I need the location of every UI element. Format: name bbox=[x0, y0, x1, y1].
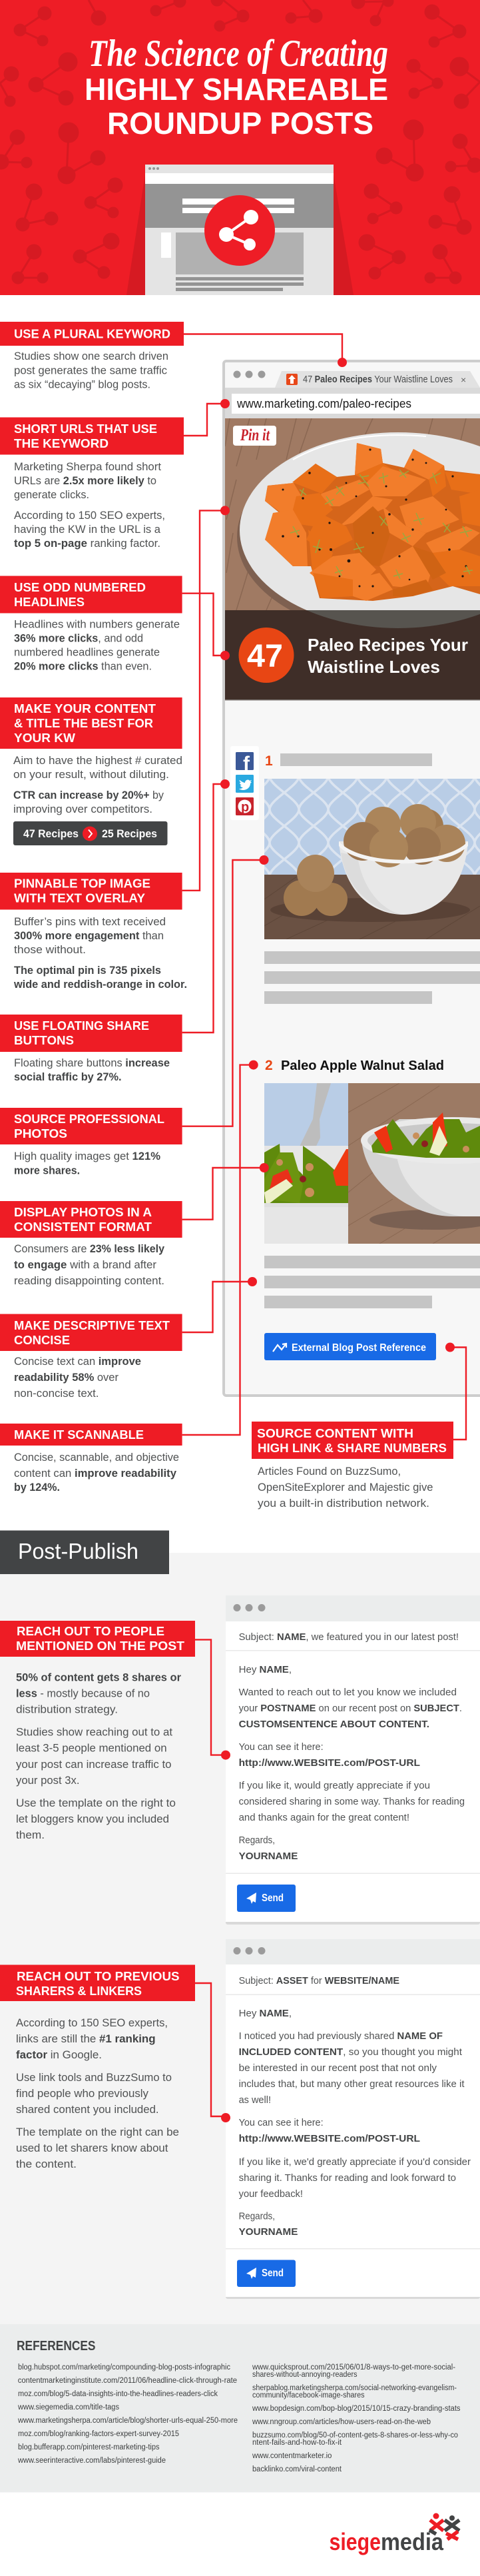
list item 1 heading placeholder: 1 bbox=[265, 753, 273, 769]
references left column: blog.bufferapp.com/pinterest-marketing-tips bbox=[18, 2443, 160, 2451]
callout: odd numbered headlines: USE ODD NUMBERED bbox=[14, 580, 146, 594]
email template 1: CUSTOMSENTENCE ABOUT CONTENT. bbox=[239, 1719, 429, 1730]
callout: reach out to people mentioned: REACH OUT TO PEOPLE bbox=[17, 1624, 164, 1638]
callout: reach out to people mentioned bbox=[0, 1621, 195, 1841]
callout: reach out to previous sharers: Use link tools and BuzzSumo to bbox=[16, 2071, 172, 2084]
callout: make it scannable: MAKE IT SCANNABLE bbox=[14, 1428, 144, 1442]
email template 2: You can see it here: bbox=[239, 2117, 324, 2128]
heading: post-publish: Post-Publish bbox=[18, 1539, 138, 1563]
pin it button: Pin it bbox=[240, 426, 270, 444]
callout: best content and title: on your result, without diluting. bbox=[13, 768, 169, 781]
browser chrome and tab bbox=[233, 370, 480, 388]
references right column: ntent-fails-and-how-to-fix-it bbox=[252, 2439, 342, 2447]
share buttons bbox=[230, 746, 259, 820]
panel: references bbox=[0, 2324, 480, 2493]
callout: short urls: top 5 on-page ranking factor. bbox=[14, 537, 160, 550]
callout: use a plural keyword: as six “decaying” blog posts. bbox=[14, 378, 150, 390]
references left column: www.seerinteractive.com/labs/pinterest-guide bbox=[17, 2457, 166, 2465]
callout: use a plural keyword: USE A PLURAL KEYWORD bbox=[14, 326, 170, 341]
email template 2: Subject: ASSET for WEBSITE/NAME bbox=[239, 1975, 399, 1986]
references right column: www.nngroup.com/articles/how-users-read-on-the-web bbox=[252, 2418, 431, 2426]
callout: source content: SOURCE CONTENT WITH bbox=[257, 1426, 413, 1440]
email template 2: INCLUDED CONTENT, so you thought you might bbox=[239, 2046, 463, 2058]
comparison chip: 47 vs 25 recipes: 25 Recipes bbox=[102, 827, 157, 840]
callout: short urls: generate clicks. bbox=[14, 488, 89, 501]
references right column: shares-without-annoying-readers bbox=[252, 2371, 358, 2379]
connector lines for post-publish callouts bbox=[195, 1639, 230, 2122]
logo: siegemedia bbox=[329, 2513, 459, 2555]
logo: siegemedia: media bbox=[381, 2528, 444, 2555]
title band bbox=[225, 610, 480, 701]
callout: short urls: SHORT URLS THAT USE bbox=[14, 422, 157, 436]
callout: pinnable top image: PINNABLE TOP IMAGE bbox=[14, 877, 150, 890]
callout: short urls: URLs are 2.5x more likely to bbox=[14, 474, 156, 487]
comparison chip: 47 vs 25 recipes: 47 Recipes bbox=[23, 827, 79, 840]
callout: descriptive text concise: Concise text can improve bbox=[14, 1355, 141, 1368]
references right column bbox=[252, 2363, 461, 2473]
share buttons: f bbox=[243, 753, 250, 775]
email template 2 bbox=[226, 1939, 480, 2299]
references right column: www.quicksprout.com/2015/06/01/8-ways-to-get-more-social- bbox=[252, 2363, 455, 2371]
send button 2: Send bbox=[262, 2268, 284, 2279]
send button 1 bbox=[237, 1885, 296, 1912]
callout: reach out to people mentioned: 50% of content gets 8 shares or bbox=[16, 1671, 181, 1684]
callout: floating share buttons: social traffic by 27%. bbox=[14, 1071, 121, 1083]
callout: odd numbered headlines: 36% more clicks, and odd bbox=[14, 632, 143, 645]
comparison chip: 47 vs 25 recipes bbox=[13, 821, 168, 845]
external reference button: External Blog Post Reference bbox=[292, 1342, 426, 1354]
callout: source professional photos bbox=[0, 1108, 182, 1176]
callout: best content and title: & TITLE THE BEST FOR bbox=[14, 716, 153, 730]
list item 2 heading: Paleo Apple Walnut Salad bbox=[281, 1059, 444, 1073]
email template 1: Subject: NAME, we featured you in our latest post! bbox=[239, 1631, 459, 1643]
references left column bbox=[17, 2363, 238, 2465]
references left column: blog.hubspot.com/marketing/compounding-blog-posts-infographic bbox=[18, 2363, 230, 2371]
references left column: www.marketingsherpa.com/article/blog/shorter-urls-equal-250-more bbox=[17, 2417, 238, 2425]
callout: floating share buttons: USE FLOATING SHARE bbox=[14, 1019, 149, 1033]
image: brown balls in bowl bbox=[264, 779, 480, 939]
callout: reach out to people mentioned: Use the template on the right to bbox=[16, 1797, 176, 1809]
email template 2: sharing it. Thanks for reading and look forward to bbox=[239, 2172, 456, 2184]
email template 2: If you like it, we'd greatly appreciate if you'd consider bbox=[239, 2156, 471, 2168]
callout: pinnable top image: 300% more engagement than bbox=[14, 929, 164, 942]
callout: odd numbered headlines: 20% more clicks than even. bbox=[14, 659, 152, 673]
callout: floating share buttons: BUTTONS bbox=[14, 1033, 74, 1047]
list item 2 heading: 2 bbox=[265, 1058, 273, 1073]
references right column: sherpablog.marketingsherpa.com/social-networking-evangelism- bbox=[252, 2384, 457, 2392]
callout: best content and title: improving over competitors. bbox=[13, 803, 152, 815]
title: The Science of Creating bbox=[89, 33, 388, 75]
callout: reach out to people mentioned: Studies show reaching out to at bbox=[16, 1725, 172, 1739]
url bar bbox=[225, 388, 480, 418]
callout: source content: you a built-in distribution network. bbox=[258, 1497, 429, 1509]
callout: reach out to people mentioned: less - mostly because of no bbox=[16, 1687, 150, 1700]
callout: reach out to people mentioned: least 3-5 people mentioned on bbox=[16, 1741, 167, 1755]
callout: reach out to previous sharers: The template on the right can be bbox=[16, 2126, 179, 2138]
callout: reach out to people mentioned: distribution strategy. bbox=[16, 1703, 118, 1716]
title band: Waistline Loves bbox=[308, 657, 440, 677]
callout: odd numbered headlines: Headlines with numbers generate bbox=[14, 618, 180, 630]
email template 1: your POSTNAME on our recent post on SUBJECT. bbox=[239, 1703, 462, 1714]
callout: source content: OpenSiteExplorer and Majestic give bbox=[258, 1481, 433, 1494]
callout: reach out to previous sharers: SHARERS & LINKERS bbox=[16, 1984, 142, 1998]
email template 1: considered sharing in some way. Thanks for reading bbox=[239, 1796, 465, 1807]
callout: reach out to previous sharers: According to 150 SEO experts, bbox=[16, 2016, 168, 2029]
callout: odd numbered headlines bbox=[0, 576, 182, 673]
callout: descriptive text concise: MAKE DESCRIPTIVE TEXT bbox=[14, 1318, 170, 1332]
callout: reach out to previous sharers bbox=[0, 1965, 195, 2170]
callout: pinnable top image: those without. bbox=[14, 943, 86, 956]
email template 2: Hey NAME, bbox=[239, 2008, 292, 2019]
email template 2: YOURNAME bbox=[239, 2226, 298, 2238]
panel: post-publish section bbox=[0, 1531, 480, 2324]
callout: source professional photos: High quality images get 121% bbox=[14, 1150, 160, 1162]
references right column: buzzsumo.com/blog/50-of-content-gets-8-shares-or-less-why-co bbox=[252, 2431, 458, 2439]
references left column: moz.com/blog/ranking-factors-expert-survey-2015 bbox=[18, 2430, 179, 2438]
callout: short urls: Marketing Sherpa found short bbox=[14, 460, 161, 473]
email template 1 bbox=[226, 1595, 480, 1925]
panel: browser mockup bbox=[224, 361, 480, 1396]
callout: reach out to previous sharers: the content. bbox=[16, 2158, 77, 2170]
references right column: www.bopdesign.com/bop-blog/2015/10/15-crazy-branding-stats bbox=[252, 2405, 461, 2413]
email template 2: includes that, but many other great resources like it bbox=[239, 2078, 465, 2090]
callout: make it scannable: by 124%. bbox=[14, 1481, 60, 1494]
callout: make it scannable: Concise, scannable, and objective bbox=[14, 1451, 179, 1464]
email template 1: and thanks again for the great content! bbox=[239, 1812, 409, 1823]
callout: pinnable top image bbox=[0, 873, 187, 991]
food: orange sweet potato cubes bbox=[265, 443, 480, 601]
title band: Paleo Recipes Your bbox=[308, 635, 468, 655]
callout: floating share buttons bbox=[0, 1015, 182, 1083]
callout: consistent format: CONSISTENT FORMAT bbox=[14, 1220, 152, 1234]
callout: descriptive text concise: non-concise text. bbox=[14, 1387, 99, 1400]
callout: best content and title: MAKE YOUR CONTENT bbox=[14, 701, 156, 715]
send button 2 bbox=[237, 2260, 296, 2287]
callout: best content and title: Aim to have the highest # curated bbox=[13, 754, 182, 767]
title: ROUNDUP POSTS bbox=[107, 106, 373, 141]
callout: make it scannable: content can improve readability bbox=[14, 1467, 177, 1480]
email template 1: You can see it here: bbox=[239, 1741, 324, 1753]
callout: source content: HIGH LINK & SHARE NUMBERS bbox=[258, 1441, 447, 1455]
callout: best content and title: YOUR KW bbox=[14, 731, 76, 745]
callout: reach out to previous sharers: REACH OUT TO PREVIOUS bbox=[17, 1969, 180, 1983]
email template 1: If you like it, would greatly appreciate if you bbox=[239, 1780, 430, 1791]
callout: short urls: According to 150 SEO experts, bbox=[14, 509, 165, 522]
text placeholder bars 1 bbox=[264, 951, 480, 1004]
share buttons: p bbox=[241, 800, 249, 815]
email template 1: http://www.WEBSITE.com/POST-URL bbox=[239, 1757, 420, 1769]
callout: make it scannable bbox=[0, 1424, 182, 1494]
callout: use a plural keyword: post generates the same traffic bbox=[14, 364, 167, 377]
callout: short urls bbox=[0, 417, 184, 550]
callout: pinnable top image: WITH TEXT OVERLAY bbox=[14, 891, 146, 905]
references right column: backlinko.com/viral-content bbox=[252, 2465, 342, 2473]
heading: post-publish bbox=[0, 1531, 169, 1574]
email template 1: Wanted to reach out to let you know we included bbox=[239, 1687, 457, 1698]
references right column: www.contentmarketer.io bbox=[252, 2452, 332, 2460]
callout: best content and title: CTR can increase by 20%+ by bbox=[13, 789, 164, 801]
callout: source professional photos: PHOTOS bbox=[14, 1126, 67, 1140]
callout: reach out to people mentioned: your post can increase traffic to bbox=[16, 1758, 172, 1771]
logo: siegemedia: siege bbox=[329, 2528, 381, 2555]
send button 1: Send bbox=[262, 1893, 284, 1904]
callout: pinnable top image: Buffer’s pins with text received bbox=[14, 915, 166, 928]
callout: reach out to previous sharers: factor in Google. bbox=[16, 2048, 102, 2061]
callout: odd numbered headlines: HEADLINES bbox=[14, 595, 85, 609]
references left column: moz.com/blog/5-data-insights-into-the-headlines-readers-click bbox=[18, 2390, 218, 2398]
email template 2: be interested in our recent post that not only bbox=[239, 2062, 437, 2074]
url bar: www.marketing.com/paleo-recipes bbox=[236, 396, 411, 410]
callout: pinnable top image: wide and reddish-orange in color. bbox=[13, 978, 187, 991]
callout: reach out to previous sharers: shared content you included. bbox=[16, 2103, 159, 2116]
email template 2: Regards, bbox=[239, 2210, 275, 2222]
callout: source content bbox=[252, 1422, 453, 1509]
email template 2: I noticed you had previously shared NAME OF bbox=[239, 2030, 443, 2042]
callout: consistent format bbox=[0, 1201, 182, 1287]
callout: source professional photos: more shares. bbox=[14, 1164, 80, 1176]
browser chrome and tab: × bbox=[461, 374, 466, 385]
callout: floating share buttons: Floating share buttons increase bbox=[14, 1057, 170, 1069]
callout: short urls: having the KW in the URL is a bbox=[14, 523, 161, 536]
references right column: community/facebook-image-shares bbox=[252, 2391, 365, 2399]
email template 1: YOURNAME bbox=[239, 1851, 298, 1862]
callout: reach out to people mentioned: your post 3x. bbox=[16, 1774, 80, 1787]
callout: consistent format: DISPLAY PHOTOS IN A bbox=[14, 1205, 152, 1219]
hero image: paleo recipes on plate bbox=[225, 418, 480, 701]
callout: short urls: THE KEYWORD bbox=[14, 436, 109, 450]
callout: consistent format: Consumers are 23% less likely bbox=[14, 1242, 165, 1255]
external reference button bbox=[264, 1333, 436, 1360]
panel: red header bbox=[0, 0, 480, 295]
email template 2: http://www.WEBSITE.com/POST-URL bbox=[239, 2133, 420, 2144]
title band: 47 bbox=[247, 639, 283, 674]
callout: source professional photos: SOURCE PROFESSIONAL bbox=[14, 1112, 164, 1126]
callout: reach out to people mentioned: them. bbox=[16, 1829, 45, 1841]
callout: reach out to people mentioned: MENTIONED ON THE POST bbox=[16, 1639, 185, 1653]
text placeholder bars 2 bbox=[264, 1256, 480, 1308]
browser chrome and tab: 47 Paleo Recipes Your Waistline Loves bbox=[303, 374, 453, 385]
callout: consistent format: to engage with a brand after bbox=[14, 1258, 156, 1271]
image: salad bowl on wood bbox=[348, 1083, 480, 1244]
callout: consistent format: reading disappointing content. bbox=[14, 1274, 164, 1287]
panel: references: REFERENCES bbox=[17, 2339, 96, 2354]
callout: use a plural keyword: Studies show one search driven bbox=[14, 350, 168, 362]
callout: use a plural keyword bbox=[0, 322, 184, 390]
callout: descriptive text concise: CONCISE bbox=[14, 1333, 70, 1347]
email template 2: as well! bbox=[239, 2094, 271, 2106]
callout: descriptive text concise: readability 58% over bbox=[14, 1371, 119, 1384]
callout: reach out to previous sharers: find people who previously bbox=[16, 2087, 148, 2100]
references left column: contentmarketinginstitute.com/2011/06/headline-click-through-rate bbox=[18, 2377, 237, 2385]
email template 2: your feedback! bbox=[239, 2188, 303, 2200]
callout: reach out to people mentioned: let bloggers know you included bbox=[16, 1813, 169, 1825]
list item 1 heading placeholder bbox=[265, 753, 432, 769]
callout: pinnable top image: The optimal pin is 735 pixels bbox=[14, 964, 161, 977]
email template 1: Hey NAME, bbox=[239, 1664, 292, 1675]
icon: browser with share symbol bbox=[126, 165, 354, 295]
callout: odd numbered headlines: numbered headlines generate bbox=[14, 646, 160, 658]
references left column: www.siegemedia.com/title-tags bbox=[17, 2403, 119, 2411]
callout: source content: Articles Found on BuzzSumo, bbox=[258, 1465, 401, 1478]
callout: descriptive text concise bbox=[0, 1314, 182, 1400]
image: salad left close-up bbox=[264, 1083, 348, 1244]
callout: reach out to previous sharers: links are still the #1 ranking bbox=[16, 2032, 156, 2045]
callout: best content and title bbox=[0, 697, 182, 845]
title: HIGHLY SHAREABLE bbox=[85, 72, 388, 107]
connector lines and dots bbox=[182, 334, 466, 1440]
email template 1: Regards, bbox=[239, 1835, 275, 1846]
callout: reach out to previous sharers: used to let sharers know about bbox=[16, 2142, 168, 2154]
title bbox=[85, 33, 388, 141]
